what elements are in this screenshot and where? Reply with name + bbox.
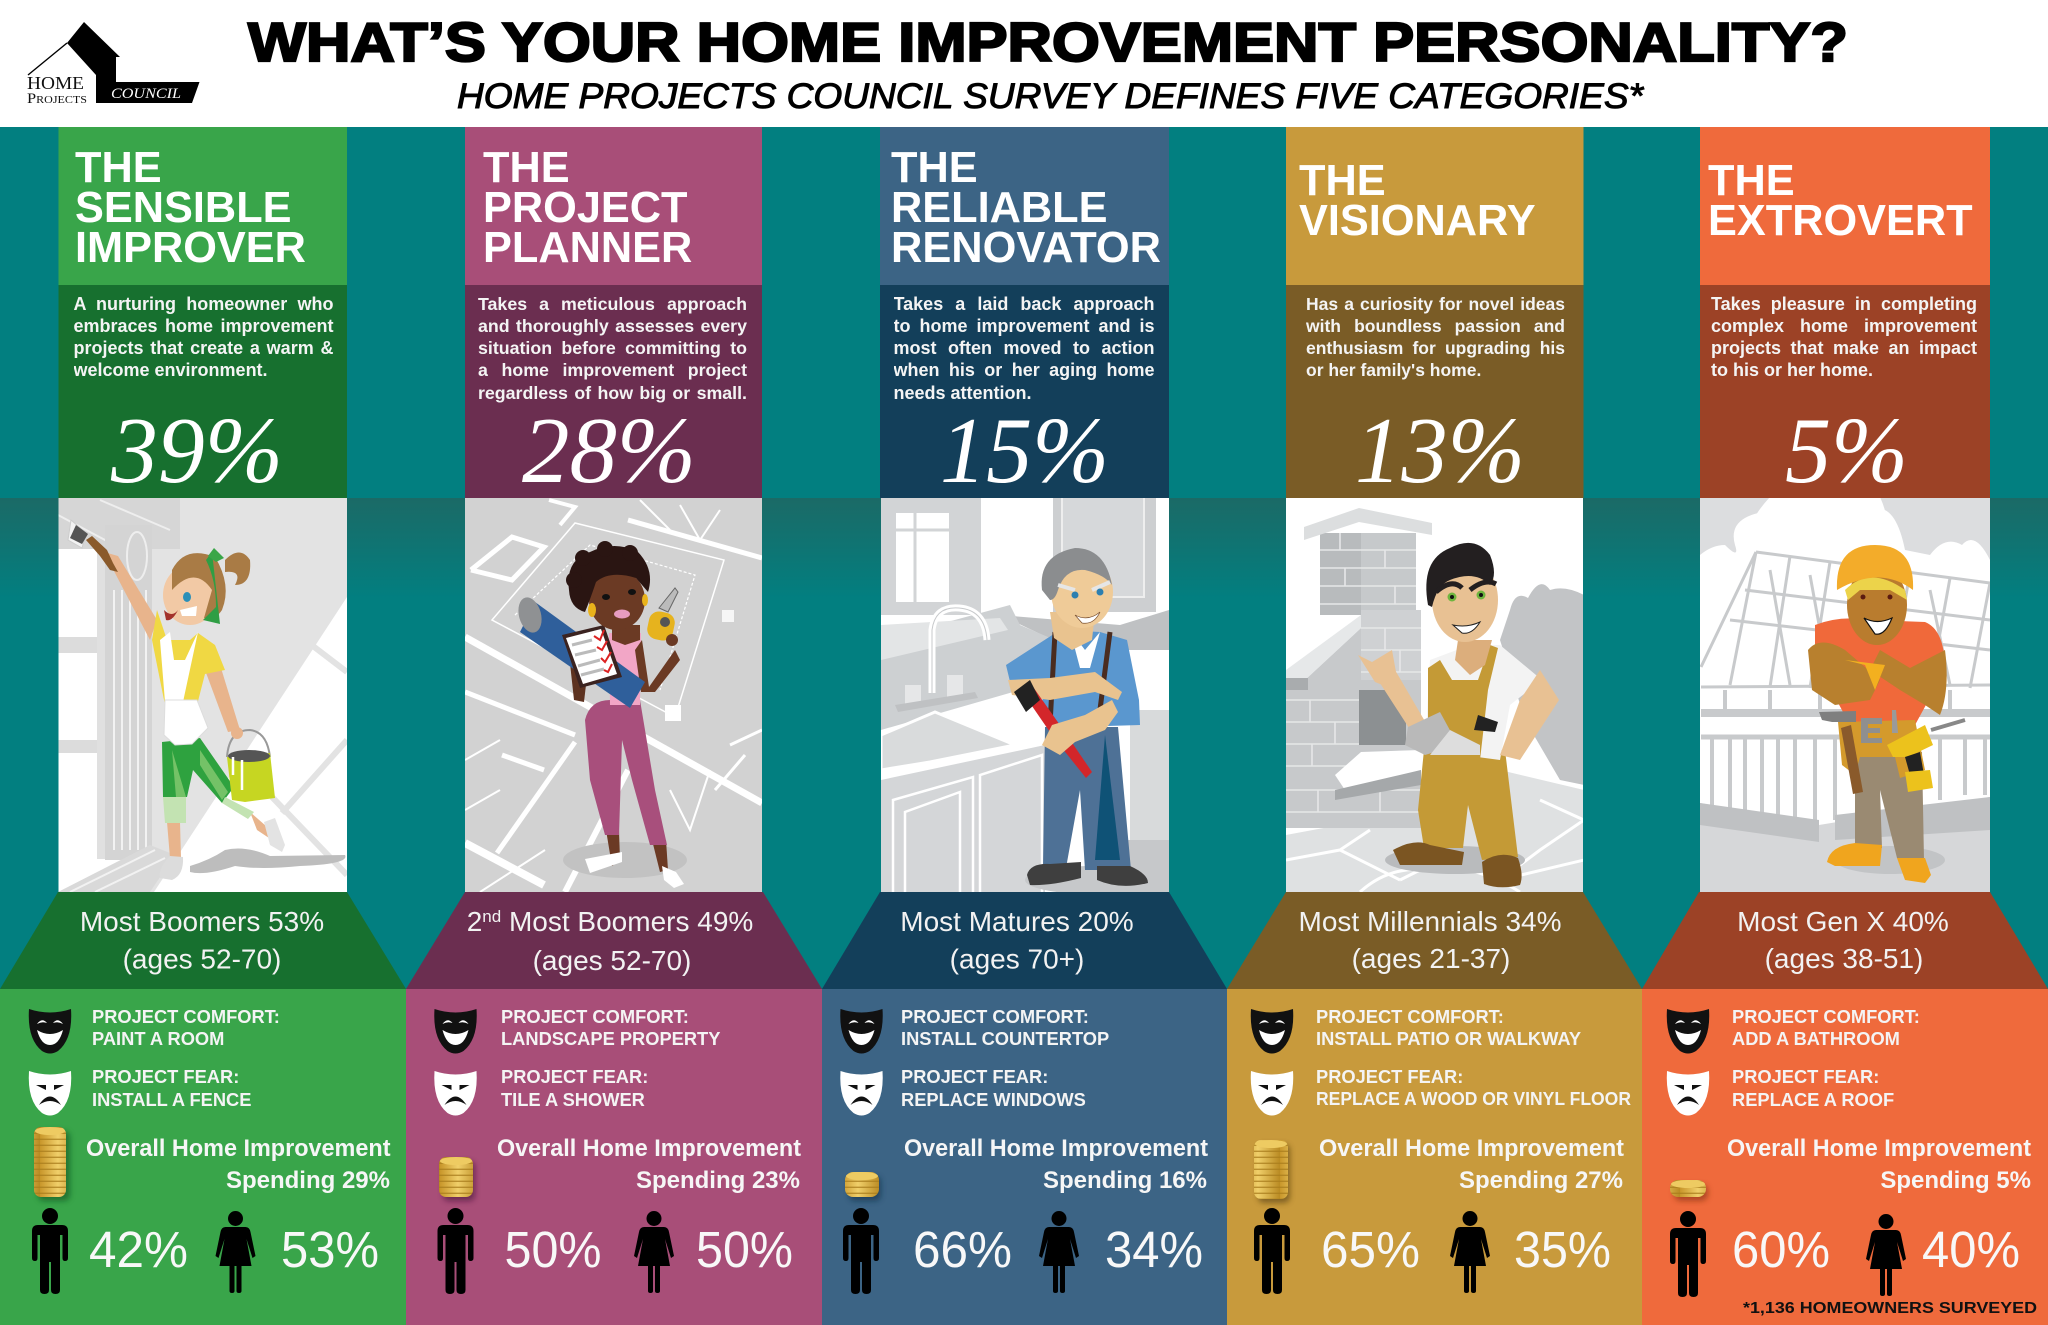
description panel: projects that create a warm & [74,338,334,358]
stats panel [1227,989,1642,1325]
title: WHAT’S YOUR HOME IMPROVEMENT PERSONALITY? [248,11,1848,73]
illustration: builder with hard hat and house frame [1700,497,1990,893]
spending text: Spending 27% [1459,1167,1623,1194]
project fear text: REPLACE WINDOWS [901,1089,1086,1110]
female percent: 50% [696,1221,793,1278]
generation trapezoid: Most Millennials 34% [1298,906,1562,937]
icon: coin stack [1254,1140,1290,1203]
female percent: 40% [1922,1221,2020,1278]
spending text: Overall Home Improvement [1319,1135,1624,1162]
stats panel [406,989,822,1325]
title panel [1700,127,1990,285]
icon: fear mask [434,1071,477,1116]
title panel: PROJECT [483,184,688,232]
spending text: Overall Home Improvement [1727,1135,2031,1162]
generation trapezoid: Most Matures 20% [900,906,1134,937]
project comfort text: PROJECT COMFORT: [501,1006,689,1027]
stats panel [1642,989,2048,1325]
description panel: A nurturing homeowner who [74,294,334,314]
project fear text [501,1066,648,1110]
project fear text [1316,1066,1631,1109]
project comfort text: INSTALL COUNTERTOP [901,1028,1109,1049]
description panel: welcome environment. [74,360,268,380]
generation trapezoid [1227,892,1642,989]
project comfort text: INSTALL PATIO OR WALKWAY [1316,1028,1581,1049]
title panel: IMPROVER [75,224,306,272]
generation trapezoid: 2 [467,906,482,937]
title panel: THE [1299,157,1386,205]
project comfort text: PAINT A ROOM [92,1028,224,1049]
title panel: VISIONARY [1299,197,1536,245]
male percent: 42% [89,1221,188,1278]
description panel: regardless of how big or small. [478,382,747,402]
icon: comfort mask [840,1009,883,1054]
project comfort text: PROJECT COMFORT: [1732,1006,1920,1027]
description panel: and thoroughly assesses every [478,316,747,336]
header [27,11,1848,116]
description panel: enthusiasm for upgrading his [1306,338,1565,358]
generation trapezoid [406,892,822,989]
project fear text: TILE A SHOWER [501,1089,645,1110]
generation trapezoid [1642,892,2048,989]
title panel: PLANNER [483,224,692,272]
project fear text: INSTALL A FENCE [92,1089,251,1110]
description panel: when his or her aging home [894,360,1154,380]
description panel: Takes a laid back approach [894,294,1154,314]
female percent: 35% [1514,1221,1611,1278]
logo: home projects council [27,22,200,107]
project fear text: PROJECT FEAR: [1316,1066,1463,1087]
project comfort text: PROJECT COMFORT: [1316,1006,1504,1027]
description panel [1286,285,1584,503]
male percent: 66% [913,1221,1012,1278]
generation trapezoid: (ages 52-70) [123,944,281,974]
project fear text: REPLACE A WOOD OR VINYL FLOOR [1316,1088,1631,1109]
male percent: 60% [1732,1221,1830,1278]
description panel: most often moved to action [894,338,1154,358]
description panel: needs attention. [894,382,1032,402]
icon: man [1670,1211,1706,1297]
description panel: to his or her home. [1711,360,1873,380]
illustration: older man with pipe wrench in kitchen [881,497,1170,894]
column: the sensible improver [0,127,406,1325]
project fear text: PROJECT FEAR: [501,1066,648,1087]
generation trapezoid [822,892,1227,989]
generation trapezoid: (ages 38-51) [1765,943,1923,974]
icon: woman [1039,1211,1079,1293]
icon: woman [216,1211,256,1293]
spending text: Spending 16% [1043,1167,1207,1194]
project comfort text [901,1006,1109,1049]
icon: woman [1450,1211,1490,1293]
title panel: THE [483,144,570,192]
project fear text [1732,1066,1894,1110]
icon: comfort mask [1667,1009,1709,1054]
spending text [86,1135,391,1194]
icon: man [843,1208,879,1294]
project comfort text [1732,1006,1920,1049]
project fear text: PROJECT FEAR: [1732,1066,1879,1087]
spending text [904,1135,1208,1194]
column: the reliable renovator [822,127,1227,1325]
icon: comfort mask [29,1009,71,1054]
description panel: complex home improvement [1711,316,1977,336]
description panel: 15% [940,399,1109,503]
title panel [58,127,347,285]
spending text: Spending 29% [226,1167,390,1194]
generation trapezoid: Most Boomers 53% [80,906,324,937]
description panel: 5% [1785,399,1908,503]
icon: fear mask [1251,1071,1293,1116]
spending text: Overall Home Improvement [497,1135,801,1162]
icon: comfort mask [1251,1009,1293,1054]
description panel: 39% [110,399,283,503]
footnote: *1,136 HOMEOWNERS SURVEYED [1743,1300,2037,1317]
icon: coin stack [1670,1180,1708,1201]
logo: home projects council: HOME [27,73,84,93]
illustration: woman with blueprints and clipboard [465,497,763,893]
description panel: a home improvement project [478,360,747,380]
spending text: Overall Home Improvement [86,1135,391,1162]
generation trapezoid [0,892,406,989]
icon: comfort mask [434,1009,477,1054]
icon: woman [1866,1214,1906,1296]
logo: home projects council: COUNCIL [111,86,181,102]
male percent: 65% [1321,1221,1420,1278]
project comfort text: PROJECT COMFORT: [901,1006,1089,1027]
male percent: 50% [504,1221,602,1278]
icon: woman [634,1211,674,1293]
generation trapezoid: (ages 70+) [950,944,1084,974]
title panel [465,127,762,285]
spending text [1319,1135,1624,1194]
title panel [1286,127,1584,285]
description panel: to home improvement and is [894,316,1154,336]
project comfort text [1316,1006,1581,1049]
description panel: projects that make an impact [1711,338,1977,358]
title panel: RELIABLE [891,184,1108,232]
description panel: situation before committing to [478,338,747,358]
subtitle: HOME PROJECTS COUNCIL SURVEY DEFINES FIVE CATEGORIES* [457,77,1644,116]
title panel: EXTROVERT [1708,197,1973,245]
icon: fear mask [840,1071,883,1116]
icon: fear mask [29,1071,71,1116]
description panel [58,285,347,503]
spending text: Spending 5% [1880,1167,2031,1194]
icon: man [438,1208,474,1294]
spending text [1727,1135,2031,1194]
column: the visionary [1227,127,1642,1325]
description panel: Takes a meticulous approach [478,294,747,314]
project fear text: REPLACE A ROOF [1732,1089,1894,1110]
title panel: SENSIBLE [75,184,292,232]
description panel: Takes pleasure in completing [1711,294,1977,314]
generation trapezoid: nd [482,907,501,926]
project comfort text: ADD A BATHROOM [1732,1028,1900,1049]
description panel [465,285,762,503]
icon: coin stack [439,1157,475,1201]
title panel [880,127,1169,285]
title panel: THE [891,144,978,192]
description panel: 13% [1355,399,1525,503]
illustration: woman painting a window frame [58,497,348,893]
description panel: Has a curiosity for novel ideas [1306,294,1565,314]
generation trapezoid: Most Gen X 40% [1737,906,1949,937]
description panel: or her family's home. [1306,360,1481,380]
logo: home projects council: PROJECTS [27,91,87,107]
project fear text: PROJECT FEAR: [901,1066,1048,1087]
project fear text: PROJECT FEAR: [92,1066,239,1087]
icon: coin stack [34,1127,70,1201]
description panel: with boundless passion and [1306,316,1565,336]
description panel [880,285,1169,503]
description panel [1700,285,1990,503]
icon: man [32,1208,68,1294]
illustration: man in overalls with stone chimney [1286,497,1584,893]
spending text [497,1135,801,1194]
generation trapezoid: (ages 21-37) [1352,943,1510,974]
project comfort text: PROJECT COMFORT: [92,1006,280,1027]
title panel: RENOVATOR [891,224,1161,272]
column: the project planner [406,127,822,1325]
generation trapezoid: Most Boomers 49% [501,906,753,937]
project comfort text [501,1006,720,1049]
title panel: THE [75,144,162,192]
project fear text [92,1066,251,1110]
description panel: embraces home improvement [74,316,334,336]
description panel: 28% [522,399,696,503]
female percent: 53% [281,1221,379,1278]
generation trapezoid: (ages 52-70) [533,945,691,976]
title panel: THE [1708,157,1795,205]
icon: coin stack [845,1172,881,1201]
project comfort text [92,1006,280,1049]
stats panel [0,989,406,1325]
spending text: Spending 23% [636,1167,800,1194]
stats panel [822,989,1227,1325]
spending text: Overall Home Improvement [904,1135,1208,1162]
icon: fear mask [1667,1071,1709,1116]
column: the extrovert [1642,127,2048,1325]
project comfort text: LANDSCAPE PROPERTY [501,1028,720,1049]
female percent: 34% [1105,1221,1203,1278]
icon: man [1254,1208,1290,1294]
project fear text [901,1066,1086,1110]
